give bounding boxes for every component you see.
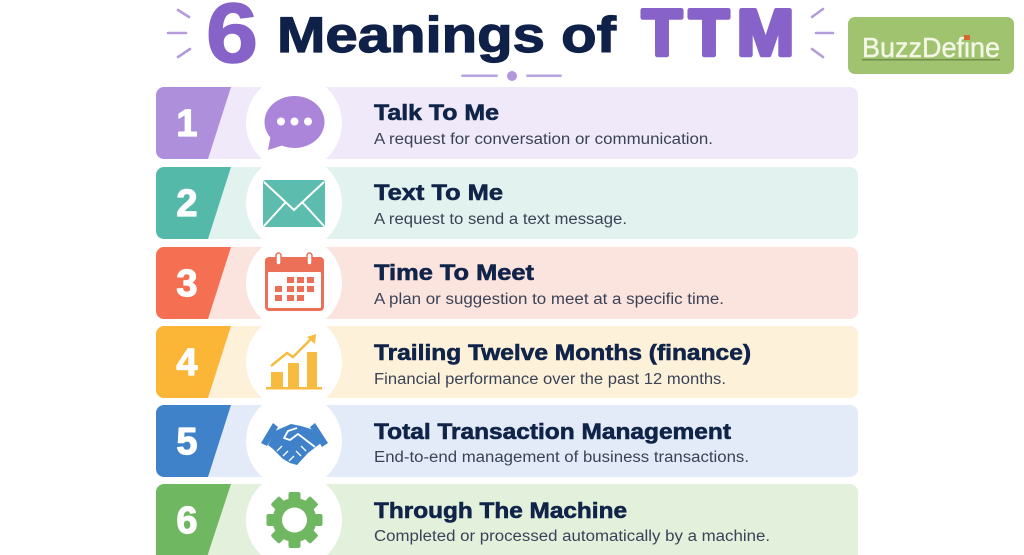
description 5: End-to-end management of business transactions. bbox=[374, 449, 749, 466]
description 3: A plan or suggestion to meet at a specific time. bbox=[374, 291, 724, 308]
description 4: Financial performance over the past 12 months. bbox=[374, 371, 726, 388]
icon: gear bbox=[266, 492, 322, 548]
panel: row 1 Talk To Me bbox=[156, 75, 858, 171]
icon circle 5 bbox=[246, 393, 342, 489]
title rays left bbox=[168, 10, 190, 57]
panel: row 3 Time To Meet bbox=[156, 235, 858, 331]
number 3: 3 bbox=[176, 263, 198, 305]
number 6: 6 bbox=[176, 500, 198, 542]
description 1: A request for conversation or communication. bbox=[374, 131, 713, 148]
panel: row 4 Trailing Twelve Months bbox=[156, 314, 858, 410]
description 2: A request to send a text message. bbox=[374, 211, 627, 228]
icon: speech bubble bbox=[264, 96, 324, 150]
number tab 1 bbox=[156, 87, 231, 159]
icon circle 3 bbox=[246, 235, 342, 331]
icon circle 6 bbox=[246, 472, 342, 555]
heading 6: Through The Machine bbox=[374, 498, 627, 523]
number tab 5 bbox=[156, 405, 231, 477]
number tab 3 bbox=[156, 247, 231, 319]
heading 4: Trailing Twelve Months (finance) bbox=[374, 340, 751, 365]
heading 1: Talk To Me bbox=[374, 100, 499, 125]
title: Meanings of bbox=[277, 7, 616, 63]
icon: growth chart bbox=[266, 334, 322, 390]
description 6: Completed or processed automatically by a machine. bbox=[374, 528, 770, 545]
heading 5: Total Transaction Management bbox=[374, 419, 732, 444]
number 5: 5 bbox=[176, 421, 198, 463]
number tab 2 bbox=[156, 167, 231, 239]
title rays right bbox=[812, 9, 833, 57]
icon circle 2 bbox=[246, 155, 342, 251]
icon: envelope bbox=[263, 180, 325, 227]
number 1: 1 bbox=[176, 103, 198, 145]
title divider bbox=[461, 71, 562, 81]
number tab 4 bbox=[156, 326, 231, 398]
icon circle 1 bbox=[246, 75, 342, 171]
panel: row 6 Through The Machine bbox=[156, 472, 858, 555]
icon: handshake bbox=[261, 423, 328, 465]
number tab 6 bbox=[156, 484, 231, 555]
icon: calendar bbox=[265, 253, 324, 311]
heading 2: Text To Me bbox=[374, 180, 503, 205]
icon circle 4 bbox=[246, 314, 342, 410]
panel: row 5 Total Transaction Management bbox=[156, 393, 858, 489]
title bbox=[206, 0, 794, 80]
heading 3: Time To Meet bbox=[374, 260, 535, 285]
number 4: 4 bbox=[176, 342, 198, 384]
panel: row 2 Text To Me bbox=[156, 155, 858, 251]
number 2: 2 bbox=[176, 183, 198, 225]
logo: BuzzDefine bbox=[848, 17, 1014, 74]
logo: BuzzDefine: BuzzDefine bbox=[862, 32, 1000, 63]
